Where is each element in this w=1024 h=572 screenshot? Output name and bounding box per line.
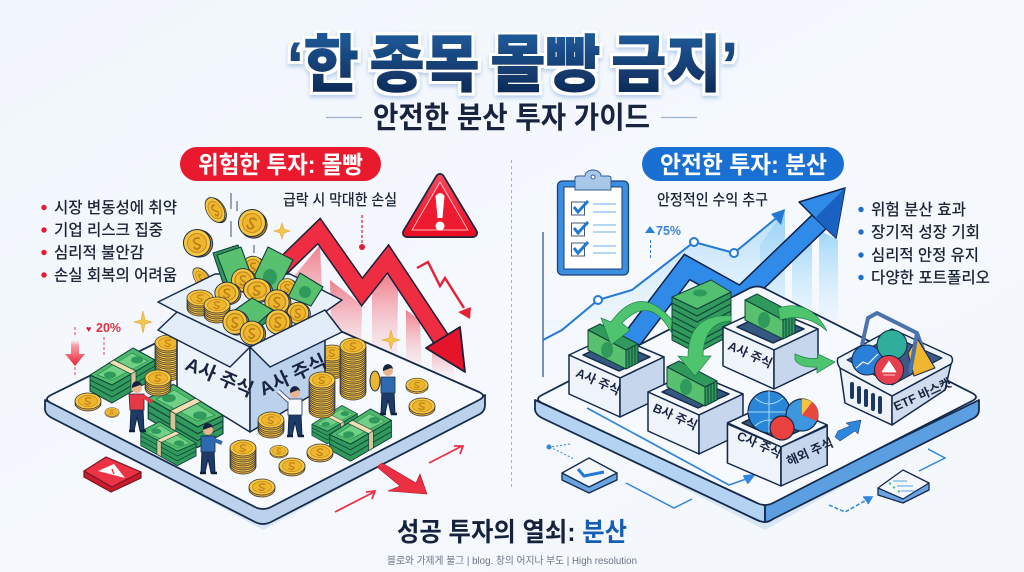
risk bullets: 기업 리스크 집중 bbox=[54, 222, 163, 240]
box: C stock bbox=[727, 391, 827, 486]
risk bullets bbox=[41, 199, 177, 284]
arrow: green to basket bbox=[795, 354, 835, 373]
chart: growth bbox=[543, 209, 838, 377]
arrow: green curved two bbox=[678, 316, 731, 376]
arrow: blue to basket bbox=[835, 420, 861, 441]
down-arrow indicator bbox=[65, 327, 85, 377]
ETF basket bbox=[837, 313, 952, 425]
red bars bbox=[295, 245, 456, 380]
money stacks bbox=[90, 348, 391, 466]
arrow: green swoosh bbox=[778, 306, 827, 331]
person: blue shirt right bbox=[370, 364, 397, 414]
arrows: thin red bbox=[335, 446, 463, 512]
sparkles bbox=[134, 223, 400, 349]
person: blue shirt left bbox=[200, 423, 222, 473]
arrow: big red down bbox=[377, 463, 427, 494]
platform: left bbox=[45, 296, 485, 530]
blue connector lines bbox=[626, 449, 945, 512]
person: white shirt bbox=[278, 386, 304, 436]
stat: 20%: ♥ bbox=[86, 324, 91, 334]
safe bullets bbox=[858, 201, 990, 287]
box contents: money and coins bbox=[187, 245, 323, 346]
safe bullets: 장기적 성장 기회 bbox=[871, 224, 980, 242]
heading pill: safe: 안전한 투자: 분산 bbox=[660, 152, 827, 179]
coin stacks behind box bbox=[155, 335, 345, 381]
icon: clipboard bbox=[558, 170, 628, 275]
box label: right: A사 주식 bbox=[256, 350, 330, 401]
falling coins bbox=[181, 193, 271, 294]
safe bullets: 위험 분산 효과 bbox=[871, 201, 966, 219]
box label: left: A사 주식 bbox=[182, 353, 256, 402]
box: B stock bbox=[648, 361, 743, 454]
subtitle: 안전한 분산 투자 가이드 bbox=[373, 102, 650, 135]
title: ‘한 종목 몰빵 금지’ bbox=[287, 31, 738, 100]
person: red shirt bbox=[129, 381, 152, 431]
A stock box bbox=[158, 245, 342, 432]
safe bullets: 심리적 안정 유지 bbox=[871, 246, 979, 264]
arrow: small zigzag bbox=[417, 262, 471, 319]
box: C stock label: C사 주식 bbox=[735, 429, 783, 461]
box: B stock label: B사 주식 bbox=[651, 401, 699, 433]
coins on platform bbox=[75, 338, 435, 497]
footer: 블로와 가제게 불그 | blog. 창의 어지나 부도 | High resolution bbox=[387, 555, 637, 567]
label: stable return: 안정적인 수익 추구 bbox=[657, 191, 768, 209]
box: second A stock label: A사 주식 bbox=[726, 339, 774, 371]
box: second A stock bbox=[723, 294, 818, 389]
loss label bbox=[283, 191, 397, 250]
risk bullets: 심리적 불안감 bbox=[54, 244, 144, 262]
loss label: 급락 시 막대한 손실 bbox=[283, 191, 397, 209]
stat: 20% bbox=[86, 321, 121, 355]
arrow: rising blue bbox=[630, 188, 845, 342]
basket label: ETF 바스켓 bbox=[892, 376, 953, 414]
arrow: falling red bbox=[280, 231, 465, 372]
box: overseas stock label: 해외 주식 bbox=[784, 435, 835, 469]
box: A stock bbox=[569, 324, 664, 417]
panel: risky investment bbox=[41, 147, 485, 530]
heading pill: risky bbox=[180, 147, 381, 181]
center divider bbox=[510, 160, 512, 490]
icon: warning triangle bbox=[407, 178, 473, 233]
key message: 성공 투자의 열쇠: 분산 bbox=[397, 517, 627, 547]
dotted connector bbox=[550, 444, 574, 459]
safe bullets: 다양한 포트폴리오 bbox=[871, 269, 990, 287]
platform: right bbox=[535, 286, 979, 530]
risk bullets: 손실 회복의 어려움 bbox=[54, 266, 177, 284]
stat: 20%: 20% bbox=[96, 321, 121, 335]
icon: warning tile bbox=[84, 457, 141, 492]
panel: safe investment bbox=[535, 147, 990, 530]
box: A stock label: A사 주식 bbox=[574, 366, 622, 398]
stat: 75% bbox=[645, 224, 681, 260]
central money stack bbox=[672, 280, 731, 353]
icon: check tile bbox=[562, 458, 617, 493]
arrow: green curved one bbox=[601, 301, 672, 345]
stat: 75%: 75% bbox=[656, 224, 681, 238]
heading pill: risky: 위험한 투자: 몰빵 bbox=[198, 152, 363, 179]
risk bullets: 시장 변동성에 취약 bbox=[54, 199, 177, 217]
heading pill: safe bbox=[642, 147, 844, 181]
icon: list tile bbox=[878, 470, 929, 503]
